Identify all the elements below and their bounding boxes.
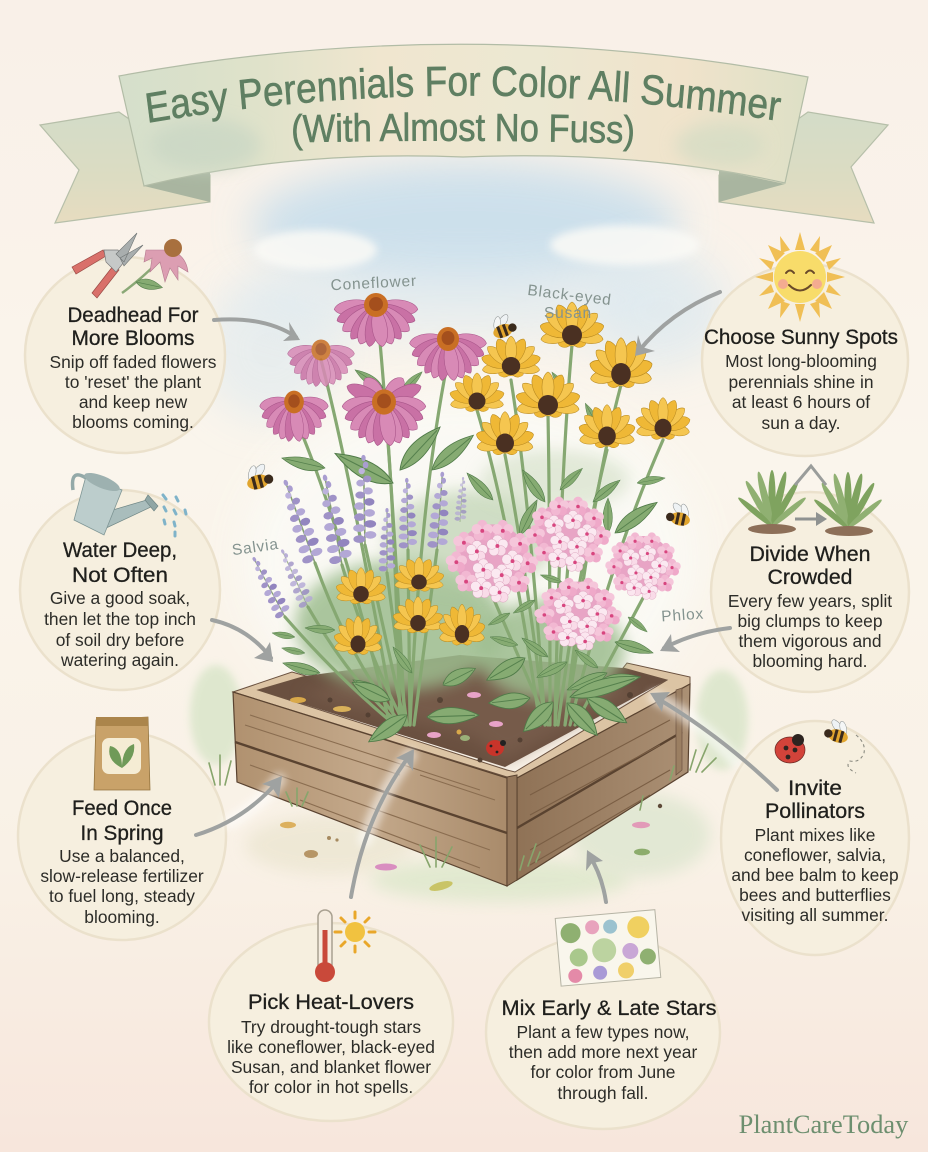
arrow: deadhead to coneflower [214, 319, 300, 341]
icon: thermometer [315, 910, 335, 982]
panel: divide: them vigorous and [738, 631, 882, 651]
panel: deadhead: More Blooms [72, 326, 194, 350]
panel: sunny spots [702, 232, 908, 456]
right front wall [517, 684, 690, 880]
panel: deadhead: blooms coming. [72, 412, 194, 432]
panel: sunny spots: Most long-blooming [725, 351, 877, 371]
plant labels: Salvia [231, 536, 280, 559]
icon: small sun [335, 912, 375, 952]
left fold [144, 170, 210, 202]
panel: divide: Divide When [750, 542, 870, 566]
panel: invite pollinators: Invite [788, 776, 842, 800]
panel: mix early and late: for color from June [531, 1062, 675, 1082]
base leaves over the soil [364, 709, 412, 749]
arrow: mix to bed [586, 850, 606, 902]
right fold [719, 170, 785, 202]
panel: sunny spots: Choose Sunny Spots [704, 325, 898, 349]
plant labels: Black-eyed [526, 282, 613, 309]
panel: heat-lovers: for color in hot spells. [249, 1077, 413, 1097]
panel: deadhead: Snip off faded flowers [50, 352, 217, 372]
corner post [507, 775, 517, 886]
panel: deadhead: Deadhead For [68, 303, 198, 327]
coneflowers [259, 293, 487, 447]
panel: feed: to fuel long, steady [49, 886, 195, 906]
plant labels: Phlox [661, 606, 705, 625]
panel: feed: Feed Once [72, 796, 172, 820]
right ribbon tail [719, 112, 888, 223]
black-eyed Susans upper group [448, 302, 692, 458]
panel: divide [711, 466, 909, 692]
panel: mix early and late: Mix Early & Late Stars [502, 996, 716, 1020]
icon: fertilizer bag [94, 717, 150, 790]
watermark: PlantCareToday [739, 1109, 909, 1139]
panel: heat-lovers [209, 910, 453, 1121]
panel: sunny spots: perennials shine in [728, 372, 874, 392]
arrow: divide to phlox [660, 628, 730, 652]
panel: invite pollinators: visiting all summer. [742, 905, 888, 925]
title: Easy Perennials For Color All Summer [146, 66, 782, 123]
panel: mix early and late: Plant a few types now, [516, 1022, 690, 1042]
soil details and ladybug [290, 692, 633, 762]
panel: deadhead: and keep new [79, 392, 188, 412]
panel: deadhead [25, 233, 225, 453]
left ribbon tail [40, 112, 210, 223]
panel: divide: Every few years, split [728, 591, 892, 611]
arrow: pollinators to bed [650, 692, 777, 790]
main ribbon [119, 44, 808, 186]
panel: invite pollinators: coneflower, salvia, [744, 845, 886, 865]
panel: feed: Use a balanced, [59, 846, 185, 866]
panel: divide: Crowded [768, 565, 852, 589]
title: (With Almost No Fuss) [293, 112, 633, 152]
icon: pruning shears [72, 233, 143, 298]
panel: mix early and late: then add more next year [509, 1042, 697, 1062]
arrow: sunny spots to susans [635, 292, 720, 356]
panel: water: of soil dry before [56, 630, 184, 650]
banner ribbon [40, 44, 888, 223]
panel: heat-lovers: like coneflower, black-eyed [227, 1037, 435, 1057]
icon: smiling sun [755, 232, 845, 322]
raised wooden garden bed [233, 655, 690, 886]
panel: sunny spots: sun a day. [762, 413, 840, 433]
panel: divide: blooming hard. [752, 651, 868, 671]
salvia spikes [246, 455, 469, 621]
soil [258, 655, 667, 767]
panel: heat-lovers: Susan, and blanket flower [231, 1057, 431, 1077]
panel: feed: blooming. [84, 907, 160, 927]
icon: ladybug [775, 734, 805, 763]
ground petals and grass tufts [209, 744, 716, 893]
icon: bee [823, 716, 864, 773]
phlox clusters [446, 497, 681, 650]
panel: water: watering again. [60, 650, 179, 670]
panel: sunny spots: at least 6 hours of [732, 392, 870, 412]
panel: water: then let the top inch [44, 609, 196, 629]
panel: deadhead: to 'reset' the plant [65, 372, 201, 392]
left front wall [233, 692, 507, 886]
panel: feed [18, 717, 226, 940]
plant labels [231, 273, 705, 625]
panel: feed: slow-release fertilizer [40, 866, 204, 886]
panel: invite pollinators [721, 716, 909, 955]
panel: water: Give a good soak, [50, 588, 190, 608]
panel: water: Water Deep, [63, 538, 177, 562]
panel: invite pollinators: Plant mixes like [755, 825, 875, 845]
black-eyed Susans lower group [333, 557, 486, 657]
lower leaves [281, 658, 321, 678]
panel: mix early and late [486, 910, 720, 1129]
plant labels: Coneflower [330, 273, 417, 294]
plant labels: Susan [544, 305, 592, 322]
panel: water: Not Often [72, 563, 168, 587]
panel: heat-lovers: Pick Heat-Lovers [248, 990, 414, 1014]
icon: watering can [73, 469, 186, 536]
panel: water [20, 469, 220, 690]
bees [243, 310, 693, 527]
panel: feed: In Spring [80, 821, 164, 845]
icon: faded coneflower [122, 239, 188, 293]
panel: heat-lovers: Try drought-tough stars [241, 1017, 421, 1037]
panel: divide: big clumps to keep [737, 611, 883, 631]
upper leaves [280, 453, 326, 474]
icon: planting plan [555, 910, 661, 986]
back rim [233, 663, 690, 778]
icon: divided clumps [736, 466, 884, 536]
panel: invite pollinators: and bee balm to keep [731, 865, 899, 885]
panel: mix early and late: through fall. [558, 1083, 648, 1103]
panel: invite pollinators: Pollinators [765, 799, 865, 823]
arrow: heat-lovers to bed [351, 749, 414, 897]
arrow: water to salvia [212, 620, 273, 662]
flower stems and foliage [271, 320, 666, 749]
panel: invite pollinators: bees and butterflies [739, 885, 891, 905]
arrow: feed to bed [196, 776, 282, 835]
